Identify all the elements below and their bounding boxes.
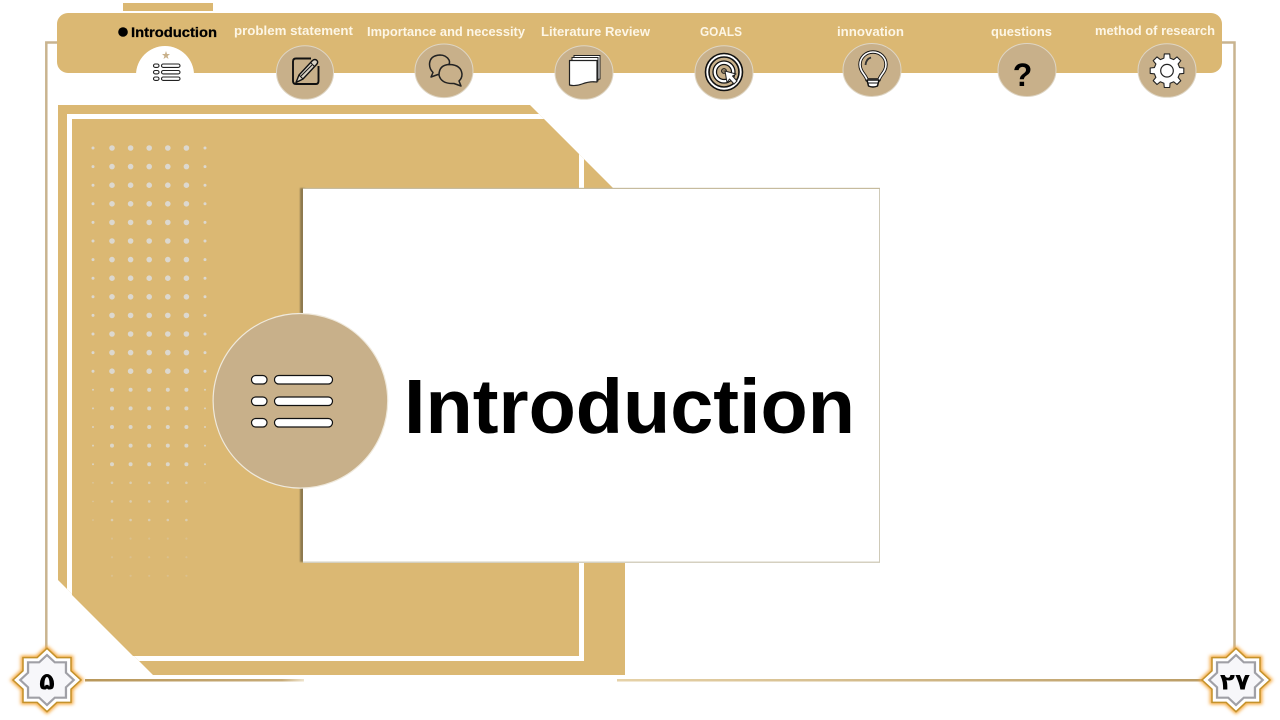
icon: list in large circle — [213, 314, 388, 488]
nav item: GOALS — [695, 24, 753, 99]
nav item: Literature Review — [541, 24, 651, 99]
tab marker above navigation bar — [123, 3, 213, 11]
nav item: Literature Review: Literature Review — [541, 24, 651, 39]
badge: current slide number: ۵ — [39, 667, 55, 695]
nav item: Importance and necessity — [367, 24, 526, 98]
nav item: method of research — [1095, 23, 1215, 97]
nav item: problem statement — [234, 23, 354, 99]
nav item: questions: questions — [991, 24, 1052, 39]
nav item: questions — [991, 24, 1056, 96]
nav item: problem statement: problem statement — [234, 23, 354, 38]
nav item: Importance and necessity: Importance and necessity — [367, 24, 526, 39]
panel: gold angled background — [58, 105, 625, 675]
nav item: method of research: method of research — [1095, 23, 1215, 38]
badge: total slide count: ۲۷ — [1220, 668, 1250, 695]
badge: current slide number — [10, 645, 84, 715]
nav item: questions: ? — [1013, 57, 1032, 93]
heading: Introduction — [404, 364, 855, 450]
nav item: Introduction (active) — [118, 25, 217, 104]
nav item: Introduction (active): Introduction — [131, 25, 217, 40]
dot pattern — [93, 148, 205, 576]
nav item: innovation — [837, 24, 904, 96]
badge: total slide count — [1199, 645, 1273, 715]
nav item: innovation: innovation — [837, 24, 904, 39]
nav item: GOALS: GOALS — [700, 24, 742, 39]
panel: white title card — [300, 188, 880, 563]
navigation bar — [57, 13, 1222, 104]
